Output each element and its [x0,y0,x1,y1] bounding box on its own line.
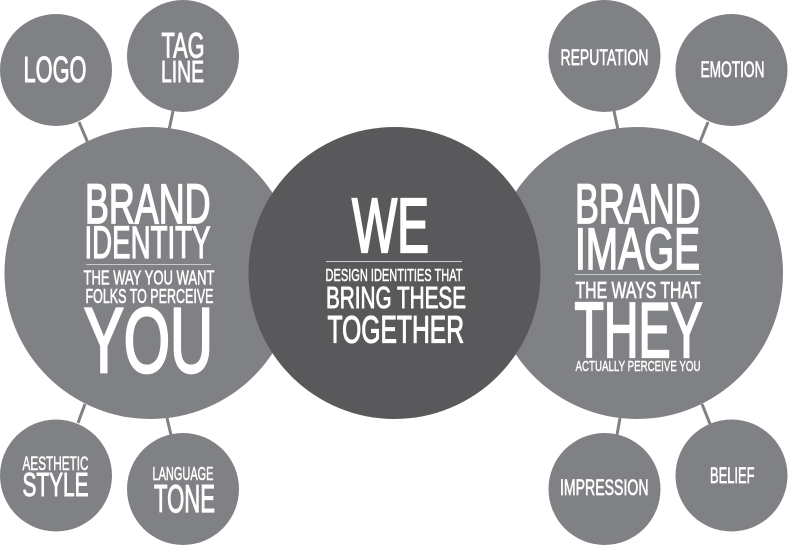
bubble: language tone: TONE [154,478,215,521]
text: the way you want: THE WAY YOU WANT [84,268,214,290]
bubble: aesthetic style: AESTHETIC [22,454,88,475]
heading: we: WE [352,183,429,269]
text: they: THEY [574,286,702,374]
text: folks to perceive: FOLKS TO PERCEIVE [86,286,214,308]
bubble: tag line: LINE [161,54,204,89]
panel: brand image [491,127,783,419]
bubble: aesthetic style: STYLE [22,466,88,503]
text: design identities that: DESIGN IDENTITIES THAT [326,265,463,285]
bubble: impression: IMPRESSION [560,475,648,500]
bubble: tag line [127,0,239,112]
bubble: language tone [127,433,239,545]
bubble: belief: BELIEF [710,463,754,488]
bubble: emotion [676,14,788,126]
panel: brand identity [4,127,296,419]
bubble: impression [548,433,660,545]
bubble: reputation [548,0,660,112]
bubble: aesthetic style [0,420,112,532]
text: you: YOU [84,290,213,392]
heading: identity: IDENTITY [84,217,210,268]
text: together: TOGETHER [328,310,464,352]
heading: brand: BRAND [85,173,210,235]
text: bring these: BRING THESE [326,281,466,315]
bubble: logo: LOGO [24,49,86,90]
text: actually perceive you: ACTUALLY PERCEIVE YOU [576,359,700,375]
heading: brand: BRAND [575,173,700,235]
bubble: logo [0,14,112,126]
connector lines [78,111,710,435]
bubble: reputation: REPUTATION [560,45,648,70]
bubble: language tone: LANGUAGE [152,464,214,484]
text: the ways that: THE WAYS THAT [576,277,700,303]
bubble: tag line: TAG [162,26,204,66]
panel: we [248,127,540,419]
bubble: belief [676,420,788,532]
heading: image: IMAGE [575,217,700,282]
